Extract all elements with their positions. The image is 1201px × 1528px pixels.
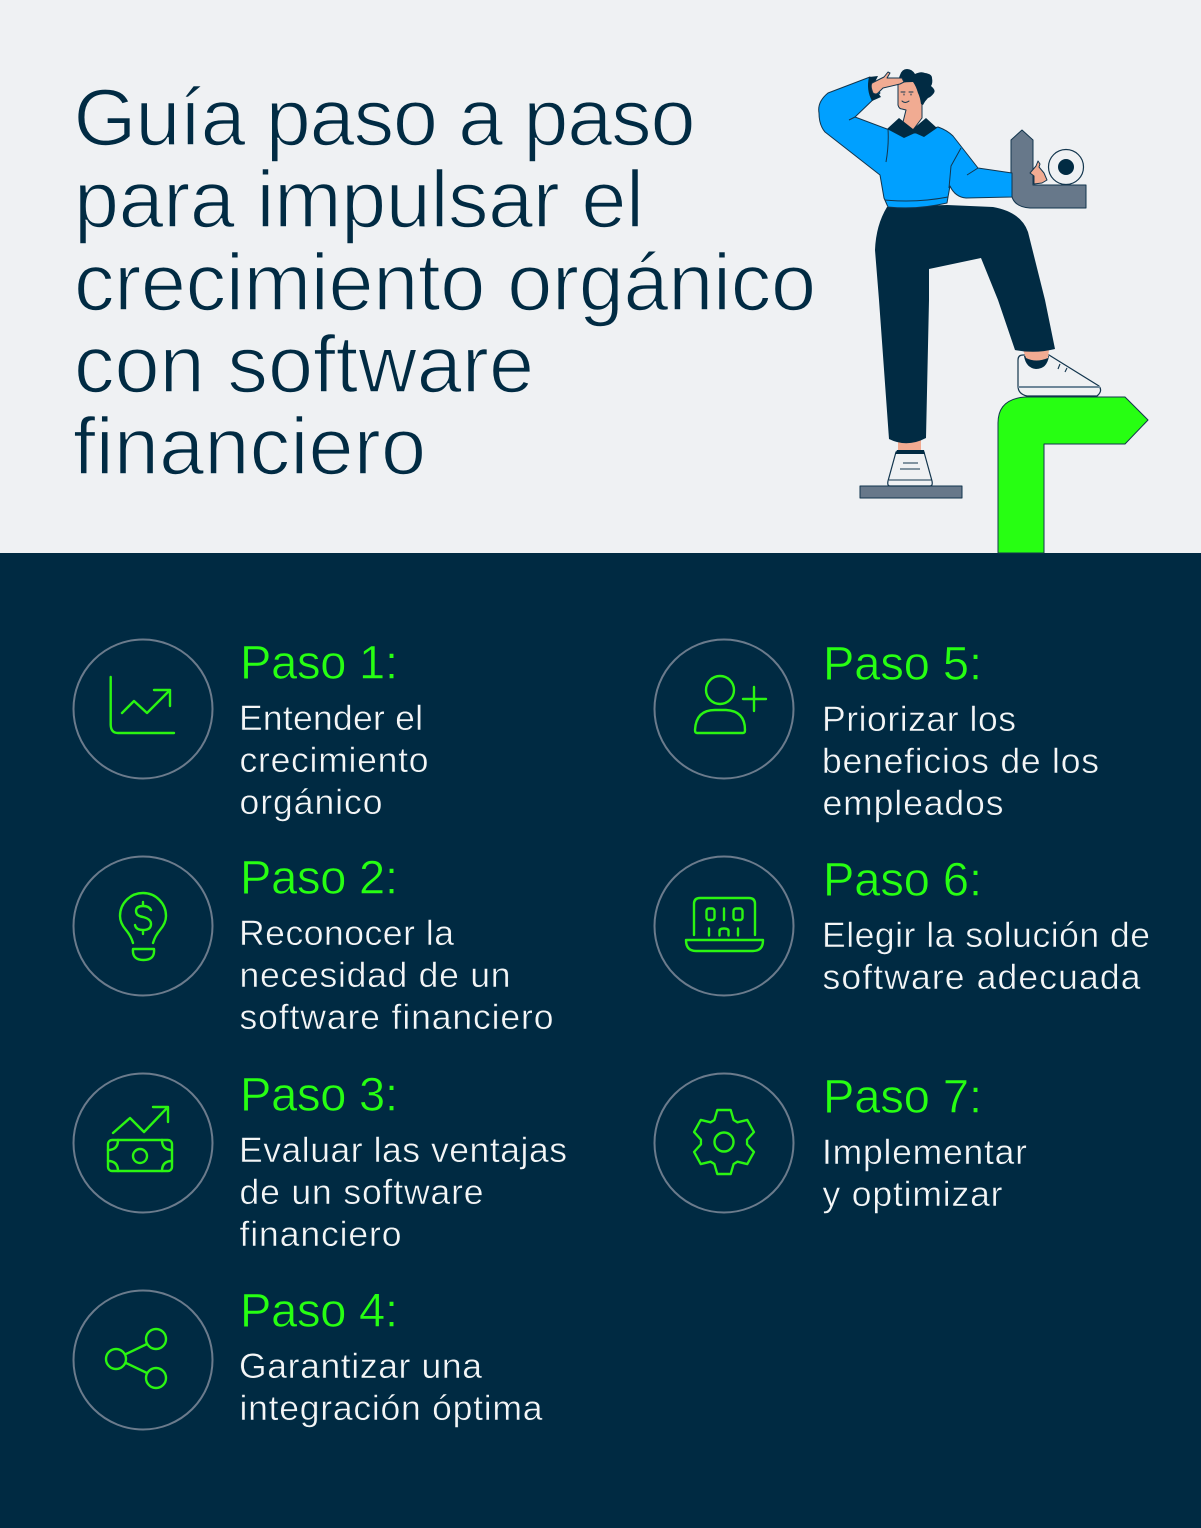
front leg sock and shoe — [1018, 350, 1101, 396]
text: step 2 description: Reconocer la — [239, 913, 454, 953]
text: step 7 description: y optimizar — [822, 1174, 1003, 1214]
gray step — [860, 486, 962, 498]
text: step 6 description: Elegir la solución de — [822, 915, 1150, 955]
neck and face — [898, 78, 925, 130]
collar — [887, 118, 937, 138]
icon: share nodes — [74, 1290, 212, 1430]
text: step 1 description: Entender el — [239, 698, 423, 738]
text: step 1 description: orgánico — [240, 782, 382, 822]
text: step 4 description: integración óptima — [240, 1388, 543, 1428]
header background — [0, 0, 1201, 553]
heading: Paso 6: Paso 6: — [823, 852, 982, 906]
text: step 4 description: Garantizar una — [239, 1346, 482, 1386]
hair — [899, 69, 935, 105]
raised hand — [871, 72, 904, 94]
icon: laptop with binary digits — [654, 856, 794, 996]
back leg sock and shoe — [888, 440, 932, 486]
icon: gear — [654, 1074, 794, 1212]
text: step 3 description: Evaluar las ventajas — [239, 1130, 567, 1170]
sleeve cuff — [868, 76, 881, 101]
title: financiero — [73, 402, 426, 492]
text: step 7 description: Implementar — [822, 1132, 1027, 1172]
title: con software — [74, 320, 534, 410]
gray arrow held by the person — [1011, 130, 1086, 208]
text: step 6 description — [822, 915, 1150, 997]
text: step 5 description — [822, 699, 1099, 823]
text: step 7 description — [822, 1132, 1027, 1214]
text: step 4 description — [239, 1346, 543, 1428]
text: step 1 description: crecimiento — [240, 740, 428, 780]
step 3 — [74, 1068, 567, 1254]
text: step 2 description: software financiero — [240, 997, 554, 1037]
dark steps panel background — [0, 553, 1201, 1528]
heading: Paso 5: Paso 5: — [823, 636, 982, 690]
title — [73, 73, 816, 492]
text: step 6 description: software adecuada — [822, 957, 1141, 997]
heading: Paso 3: Paso 3: — [240, 1068, 398, 1120]
trousers — [875, 205, 1055, 443]
title: Guía paso a paso — [74, 73, 696, 163]
text: step 5 description: beneficios de los — [822, 741, 1099, 781]
face details — [901, 92, 913, 102]
text: step 5 description: empleados — [822, 783, 1004, 823]
text: step 5 description: Priorizar los — [822, 699, 1016, 739]
hand on gray arrow — [1030, 161, 1047, 184]
heading: Paso 1: Paso 1: — [240, 636, 398, 688]
step 1 — [74, 636, 428, 822]
text: step 3 description: financiero — [240, 1214, 402, 1254]
target circle — [1048, 150, 1084, 184]
heading: Paso 2: Paso 2: — [240, 850, 398, 904]
step 4 — [74, 1284, 543, 1430]
text: step 3 description — [239, 1130, 567, 1254]
heading: Paso 7: Paso 7: — [823, 1070, 982, 1122]
icon: money with growth arrow — [74, 1074, 212, 1212]
illustration: person climbing arrows — [819, 69, 1148, 553]
text: step 2 description — [239, 913, 554, 1037]
green arrow — [998, 397, 1148, 553]
icon: add person — [654, 640, 794, 778]
step 7 — [654, 1070, 1027, 1214]
text: step 2 description: necesidad de un — [240, 955, 510, 995]
title: crecimiento orgánico — [74, 238, 816, 328]
text: step 1 description — [239, 698, 428, 822]
blue sweater — [819, 77, 1012, 208]
step 6 — [654, 852, 1150, 997]
text: step 3 description: de un software — [240, 1172, 484, 1212]
step 2 — [74, 850, 554, 1037]
icon: dollar light bulb — [74, 856, 212, 996]
title: para impulsar el — [74, 155, 644, 245]
step 5 — [654, 636, 1099, 823]
icon: growth chart — [74, 640, 212, 778]
heading: Paso 4: Paso 4: — [240, 1284, 398, 1336]
